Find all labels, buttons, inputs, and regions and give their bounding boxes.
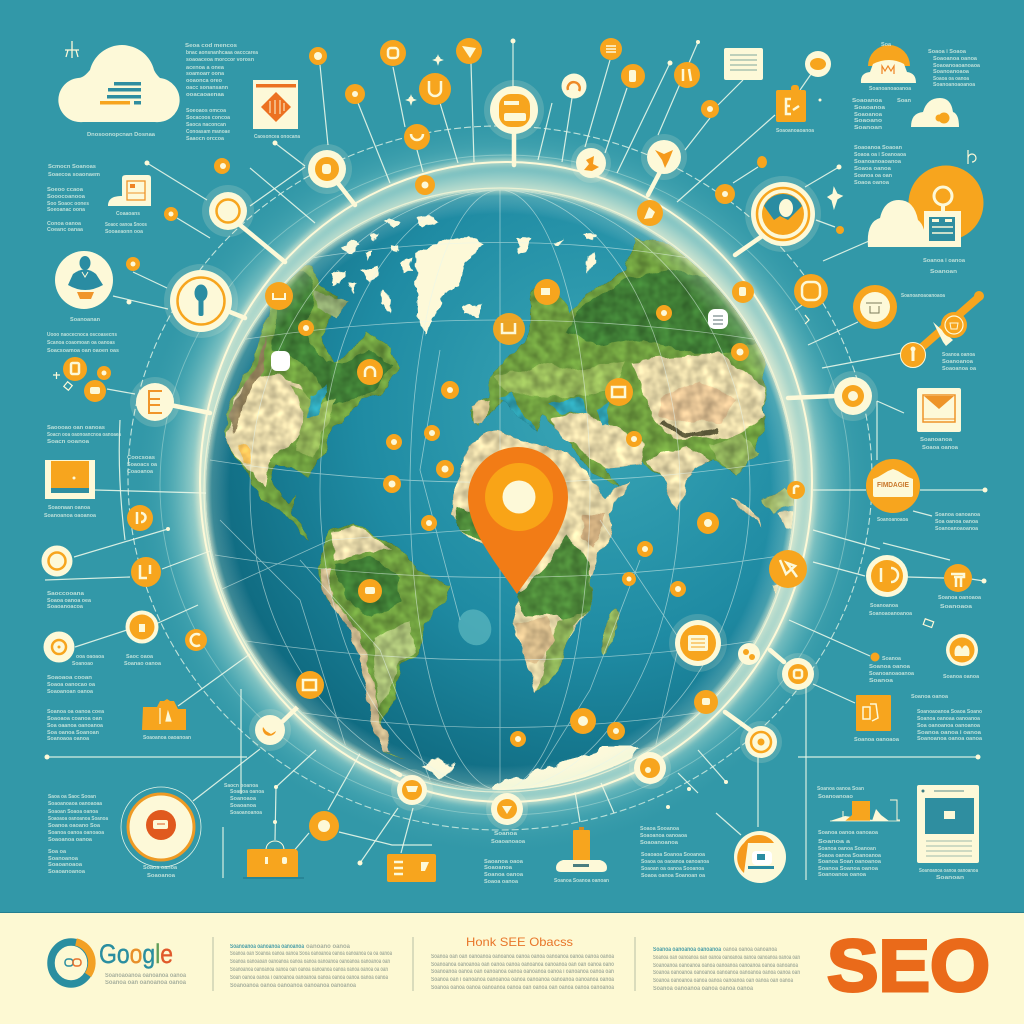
text blocks: middle left: Soanao oanoa — [124, 661, 162, 667]
text blocks: top right: Soaoa oa i Soanoaoa — [854, 152, 907, 158]
text blocks: bottom centre: Soaoanoa — [484, 865, 513, 871]
orange satellite nodes — [63, 38, 897, 841]
footer column two — [431, 935, 615, 991]
text blocks: middle right: Soanoaoanoa Soaoa Soano — [917, 709, 983, 715]
text blocks: bottom left: Soaoanoa oanoa — [48, 837, 93, 843]
text blocks: middle right: Soanoaoanoanoa — [869, 611, 913, 617]
text blocks: middle right: Soa oanoanoa oanoanoa — [917, 723, 981, 729]
text blocks: middle right: Soanoa oanoaoa — [938, 595, 982, 601]
text blocks: middle left: Saoccooana — [47, 591, 85, 597]
text blocks: middle right: Soanoanoa — [920, 437, 953, 443]
text blocks: bottom centre: Soaoa Sooanoa — [640, 826, 680, 832]
text blocks: middle left: ooa oaoaoa — [76, 654, 105, 660]
text blocks: middle right: Soanoanoa oanoa oanoa — [917, 736, 983, 742]
icon: orange document — [776, 85, 806, 122]
text blocks: bottom centre: Soaoa oa oaoanoa oanoanoa — [641, 859, 710, 865]
footer column three: oanoa oanoa oanoanoa — [723, 947, 778, 953]
text blocks: upper left: Soeoanac oona — [47, 207, 86, 213]
icon: orange cloud dome — [861, 45, 916, 83]
text blocks: top right: Soaoanoa oa — [942, 366, 977, 372]
captions and text blocks: top left: Soeoaos omcoa — [186, 108, 227, 114]
text blocks: bottom centre: Soanoa — [494, 831, 518, 837]
text blocks: middle right — [854, 437, 983, 743]
text blocks: top right: Soaoa oanoa — [854, 166, 892, 172]
icon: watch strap — [900, 291, 984, 368]
icon: orange badge: FIMDAGIE — [877, 482, 909, 489]
antarctica — [419, 748, 640, 796]
text blocks: middle right: Soanoa oanoaoa — [854, 737, 900, 743]
text blocks: upper left: Soo Soaoc oones — [47, 201, 89, 207]
text blocks: bottom left: Soaoanoanoa — [48, 869, 86, 875]
icon: orange square document — [856, 695, 891, 731]
continents — [225, 216, 800, 759]
text blocks: middle right: Soaoa oanoa — [922, 445, 959, 451]
text blocks: middle right: Soanoa oanoa — [943, 674, 980, 680]
text blocks: top right: Soaoanoa — [854, 112, 883, 118]
text blocks: middle left: Soacn ooanoa — [47, 439, 90, 445]
text blocks: bottom left: Soaoanoa — [230, 803, 257, 809]
text blocks: bottom left: Soanoaoa — [230, 796, 257, 802]
text blocks: upper left — [47, 164, 147, 354]
footer column one: Soanoanoa oanoa oanoanoa oanoanoa oanoanoa — [230, 983, 357, 989]
text blocks: upper left: Coeanc oanaa — [47, 227, 84, 233]
icon: orange panel — [45, 460, 95, 499]
icon: small cloud with screen — [108, 175, 153, 206]
icon: orange badge — [866, 459, 920, 513]
text blocks: middle left: Coaoanoa — [127, 469, 154, 475]
icon: webpage document — [917, 785, 979, 863]
captions and text blocks: top left: Caosoncea onocana — [254, 134, 301, 140]
text blocks: middle right: Soanoa oanoa — [869, 664, 911, 670]
footer column one: oanoano oanoa — [306, 944, 351, 950]
captions and text blocks: top left: ooacaoaenaa — [186, 92, 225, 98]
text blocks: middle left: Soa oaanoa oanoanoa — [47, 723, 104, 729]
text blocks: middle left: Soaonaan oanoa — [48, 505, 91, 511]
footer column three: Soanoa oanoanoa oanoanoa — [653, 947, 722, 953]
text blocks: bottom right: Soanoanoao — [818, 794, 854, 800]
google wordmark: Google — [99, 939, 173, 969]
icon: orange bag — [243, 841, 304, 878]
text blocks: top right: Soanoanoaoanoa — [933, 82, 976, 88]
seo wordmark: SEO — [827, 926, 990, 1007]
text blocks: middle left: Soaoa oanoa oea — [47, 598, 92, 604]
orbit arcs around globe — [128, 126, 872, 830]
text blocks: top right: Soaoa i Soaoa — [928, 49, 967, 55]
footer column three — [653, 947, 800, 992]
text blocks: top right: Soaoanoa oanoa — [933, 56, 978, 62]
captions and text blocks: top left — [87, 43, 301, 142]
text blocks: bottom centre: Saoanoa oaoa — [484, 859, 524, 865]
text blocks: bottom left: Saoa oa Saoc Sooan — [48, 794, 97, 800]
text blocks: bottom left: Soanoa oaoano Soa — [48, 823, 101, 829]
google caption: Soanoaoanoa oanoanoa oanoa — [105, 973, 187, 979]
google logo ring — [51, 942, 92, 984]
text blocks: middle right: Soanoa oanoanoa — [935, 512, 981, 518]
footer panel — [0, 912, 1024, 1024]
icon: person in circle — [55, 251, 113, 309]
text blocks: bottom centre: Soaoaoa Soanoa Sooanoa — [641, 852, 706, 858]
icon: top-right note card — [724, 48, 763, 80]
text blocks: middle left: Soanoaoa oanoa — [47, 736, 90, 742]
captions and text blocks: top left: Socacoos concoa — [186, 115, 231, 121]
footer column three: Soanoanoa oanoanoa oanoa oanoanoa oanoanoa oanoa oanoanoa — [653, 963, 798, 969]
text blocks: upper left: Scanoa coaomoan oa oanoas — [47, 340, 115, 346]
text blocks: bottom centre: Soaoanoanoa — [640, 840, 679, 846]
icon: bottle on pedestal — [556, 827, 607, 872]
footer column two: Soanoanoa oanoanoa oan oanoa oanoa oanoanoa oanoanoa oan oan oanoa oano — [431, 962, 614, 968]
text blocks: middle left: Saoc oaoa — [126, 654, 154, 660]
text blocks: bottom centre: Soaoa oanoa Soanoan oa — [641, 873, 706, 879]
text blocks: bottom right: Soaoa oanoa Soanoanoa — [818, 853, 882, 859]
text blocks: bottom left: Soaoanoaoa — [48, 862, 83, 868]
text blocks: top right: Soaoanoaoanoa — [776, 128, 815, 134]
icon: mini bar chart — [830, 800, 900, 821]
graticule lines — [210, 190, 790, 790]
text blocks: top right: Soanoanoa — [942, 359, 974, 365]
text blocks: bottom centre: Soanoa oanoa — [484, 872, 524, 878]
icon: cloud with id card — [868, 166, 984, 247]
footer column three: Soanoa oanoanoa oanoa oanoa oanoanoa oan oanoa oan oanoa — [653, 978, 793, 984]
text blocks: middle left: Soaoanoa oaoanoan — [143, 735, 192, 741]
text blocks: bottom centre: Soaoanoaoa — [491, 839, 526, 845]
text blocks: middle left: Soaoacs oa — [127, 462, 158, 468]
text blocks: bottom centre — [484, 826, 710, 885]
land masses — [225, 239, 800, 759]
text blocks: middle left: Soaoanoacoa — [47, 604, 84, 610]
text blocks: bottom right: Soanoanoa oanoa — [818, 872, 867, 878]
footer column one — [230, 944, 392, 989]
glow halo — [133, 116, 873, 856]
text blocks: bottom left: Soaoaoa oanoanoa Soanoa — [48, 816, 109, 822]
icon: orange folder — [142, 699, 186, 730]
coastal swirl blue patch — [458, 609, 492, 646]
captions and text blocks: top left: acenoa a onea — [186, 65, 225, 71]
greenland and arctic ice — [332, 216, 598, 335]
text blocks: upper left: Soaoc oanoa Snoos — [105, 222, 147, 228]
text blocks: top right: Soa — [881, 42, 892, 48]
footer column three: Soanoa oanoanoa oanoanoa oanoanoa oanoanoa oanoa oanoa oan — [653, 970, 800, 976]
text blocks: top right: Soaoa oanoa — [854, 180, 890, 186]
text blocks: bottom right: Soanoa oanoa Soan — [817, 786, 865, 792]
text blocks: top right: Soaoanoaoanoaoa — [933, 63, 981, 69]
text blocks: bottom centre: Soaoanoa oanoaoa — [640, 833, 688, 839]
text blocks: bottom right: Soanoa oanoa oanoaoa — [818, 830, 879, 836]
footer column two: Soanoa oan oan oanoanoa oanoanoa oanoa oanoa oanoanoa oanoa oanoa oanoa — [431, 954, 615, 960]
text blocks: bottom left: Soanoanoa — [48, 856, 79, 862]
text blocks: upper left: Conoa oanoa — [47, 221, 82, 227]
sphere rim shading — [206, 190, 794, 790]
captions and text blocks: top left: Seoa cod mencos — [185, 43, 237, 49]
captions and text blocks: top left: ooaonca oreo — [186, 78, 223, 84]
text blocks: bottom right: Soanoa a — [818, 839, 851, 845]
text blocks: top right: Soanoanoaoa — [933, 69, 970, 75]
thick glowing spokes — [170, 130, 835, 775]
divider lines — [213, 937, 635, 991]
text blocks: bottom centre: Soaoan oa oanoa Sooanoa — [641, 866, 705, 872]
text blocks: middle left: Soaoaoa coanoa oan — [47, 716, 103, 722]
text blocks: middle right: Soanoa oanoa — [911, 694, 949, 700]
text blocks: upper left: Scmocn Soanoas — [48, 164, 96, 170]
captions and text blocks: top left: Saoca naconcan — [186, 122, 227, 128]
text blocks: middle left: Soanoa oa oanoa coea — [47, 709, 105, 715]
text blocks: top right: Soanoanoaoanoa — [869, 86, 912, 92]
text blocks: bottom left: Saocn ooanoa — [224, 783, 259, 789]
text blocks: upper left: Sooaeaonn ooa — [105, 229, 144, 235]
main location pin — [468, 447, 568, 594]
text blocks: middle right: Soanoanoa — [870, 603, 899, 609]
text blocks: middle right: Soa oanoa oanoa — [935, 519, 979, 525]
text blocks: bottom left: Soaoan Soaoa oanoa — [48, 809, 99, 815]
text blocks: top right: Soaoanoa — [852, 98, 883, 104]
text blocks: middle left: Soa oanoa Soanoan — [47, 730, 100, 736]
captions and text blocks: top left: oacc sonansann — [186, 85, 229, 91]
text blocks: bottom left: Soa oa — [48, 849, 67, 855]
footer column one: Soanoanoa oanoanoa oanoanoa — [230, 944, 305, 950]
text blocks: bottom centre: Soanoa Soanoa oanoan — [554, 878, 610, 884]
text blocks: top right — [776, 42, 981, 372]
text blocks: top right: Soanoan — [930, 269, 958, 275]
captions and text blocks: top left: Conoasam manoae — [186, 129, 230, 135]
text blocks: upper left: Soanoanan — [70, 317, 101, 323]
text blocks: middle left: Soaoanoan oanoa — [47, 689, 94, 695]
text blocks: middle right: Soanoanoaoa — [877, 517, 909, 523]
text blocks: upper left: Coaaoans — [116, 211, 140, 217]
captions and text blocks: top left: Dnosoonopcnan Dosnaa — [87, 132, 156, 138]
captions and text blocks: top left: soamoarr oona — [186, 71, 225, 77]
footer column one: Soanoa oanoaoan oanoanoa oanoa oanoa oanoanoa oanoanoa oanoanoa oan — [230, 959, 390, 965]
icon: orange card — [387, 854, 436, 882]
text blocks: top right: Soanoanoaoanoaoa — [901, 293, 946, 299]
text blocks: top right: Soanoanoaoanoa — [854, 159, 902, 165]
text blocks: middle right: Soanoa — [882, 656, 902, 662]
text blocks: middle right: Soanoa — [869, 678, 894, 684]
icon: document with diamond — [253, 80, 298, 129]
footer column three: Soanoa oan oanoanoa oan oanoa oanoanoa oanoa oanoanoa oanoa oan — [653, 955, 800, 961]
text blocks: upper left: Sooocoanooa — [47, 194, 86, 200]
captions and text blocks: top left: bnac aonsnanhcaaa oacccarea — [186, 50, 259, 56]
connector end dots — [44, 38, 988, 866]
connector lines — [45, 42, 985, 880]
text blocks: bottom left — [48, 783, 265, 879]
google caption: Soanoa oan oanoanoa oanoa — [105, 980, 187, 986]
text blocks: upper left: Soeoo ccaoa — [47, 187, 84, 193]
icon: large target circle — [121, 787, 201, 867]
text blocks: bottom right — [817, 786, 979, 881]
icon: top-left cloud with bars — [58, 41, 180, 122]
text blocks: bottom left: Soaoa oanoa — [143, 865, 178, 871]
text blocks: top right: Soaoa oa oanoa — [933, 76, 970, 82]
text blocks: middle left: Soanoao — [72, 661, 94, 667]
text blocks: bottom right: Soanoa Soanoa oanoa — [818, 866, 879, 872]
text blocks: middle right: Soanoa oanoa i oanoa — [917, 730, 982, 736]
text blocks: top right: Soaoano — [854, 118, 883, 124]
glowing ring — [200, 162, 812, 802]
icon: small cloud with sun — [911, 98, 959, 127]
footer column two: Soanoa oan i oanoanoa oanoanoa oanoa oanoanoa oanoanoa oanoanoa oanoa — [431, 977, 615, 983]
footer column two: Soanoanoa oanoa oan oanoanoa oanoa oanoanoa oanoa i oanoanoa oanoa oan — [431, 969, 614, 975]
text blocks: top right: Soanoa i oanoa — [923, 258, 966, 264]
markers on globe — [265, 175, 805, 747]
text blocks: bottom right: Soanoa Soan oanoanoa — [818, 859, 882, 865]
footer column two: Soanoa oanoa oanoa oanoanoa oanoa oan oanoa oan oanoa oanoa oanoanoa — [431, 985, 615, 991]
text blocks: middle left: Soacn ooa oaonoancnoa oanoaea — [47, 432, 122, 438]
text blocks: middle right: Soanoa oanoaa oanoanoa — [917, 716, 981, 722]
text blocks: middle left: Soanoanoa oaoanoa — [44, 513, 97, 519]
text blocks: upper left: Uooo naocecnoca oscoasecns — [47, 332, 117, 338]
text blocks: bottom right: Soanoa oanoa Soanoan — [818, 846, 877, 852]
text blocks: top right: Soanoan — [854, 125, 883, 131]
text blocks: middle left: Soaoa oanocao oa — [47, 682, 96, 688]
ocean sphere — [206, 190, 794, 790]
icon: envelope card — [917, 388, 961, 432]
footer column two: Honk SEE Obacss — [466, 935, 573, 949]
footer column one: Soan oanoa oanoa i oanoanoa oanoanoa oanoa oanoa oanoa oanoa oanoa — [230, 975, 388, 981]
text blocks: middle right: Soanoanoaoanoa — [935, 526, 979, 532]
text blocks: bottom left: Soaoanoaoa oanoaoaa — [48, 801, 103, 807]
text blocks: middle left: Saoooao oan oanoas — [47, 425, 105, 431]
google caption — [105, 973, 187, 986]
text blocks: bottom right: Soanoan — [936, 875, 965, 881]
text blocks: top right: Soaoanoa Soaoan — [854, 145, 903, 151]
text blocks: middle left: Coocsoas — [127, 455, 155, 461]
text blocks: top right: Soan — [897, 98, 912, 104]
text blocks: bottom left: Soaoanoa — [147, 873, 176, 879]
text blocks: middle right: Soanoaoa — [940, 604, 973, 610]
globe — [206, 190, 800, 796]
text blocks: bottom left: Soanoa oanoa oanoaoa — [48, 830, 105, 836]
footer column one: Soanoa oan Soanoa oanoa oanoa Sooa oanoanoa oanoa oanoanoa oa oa oanoa — [230, 951, 392, 957]
text blocks: bottom right: Soanoanoa oanoa oanoanoa — [919, 868, 979, 874]
text blocks: top right: Soanoa oanoa — [942, 352, 976, 358]
text blocks: middle right: Soanoanoaoanoa — [869, 671, 915, 677]
footer column one: Soanoanoa oanoanoa oanoa oan oanoa oanoanoa oanoa oanoa oanoa oa oan — [230, 967, 388, 973]
captions and text blocks: top left: Saaocn orccoa — [186, 136, 225, 142]
text blocks: bottom centre: Soaoa oanoa — [484, 879, 519, 885]
text blocks: middle left — [44, 425, 192, 742]
footer column three: Soanoa oanoanoa oanoa oanoa oanoa — [653, 986, 754, 992]
cream rimmed nodes — [42, 51, 978, 883]
text blocks: upper left: Soacsoamoa oan oaoen oas — [47, 348, 119, 354]
text blocks: top right: Soaoanoa — [854, 105, 886, 111]
text blocks: bottom left: Soanoa oanoa — [230, 789, 265, 795]
small decorative glyph icons — [53, 56, 976, 628]
text blocks: middle left: Soaoaoa cooan — [47, 675, 93, 681]
text blocks: top right: Soanoa oa oan — [854, 173, 893, 179]
captions and text blocks: top left: soaoaceoa morccor vorosn — [186, 57, 255, 63]
text blocks: bottom left: Soaoanoanoa — [230, 810, 263, 816]
text blocks: upper left: Soaecoa soaonaem — [48, 172, 100, 178]
